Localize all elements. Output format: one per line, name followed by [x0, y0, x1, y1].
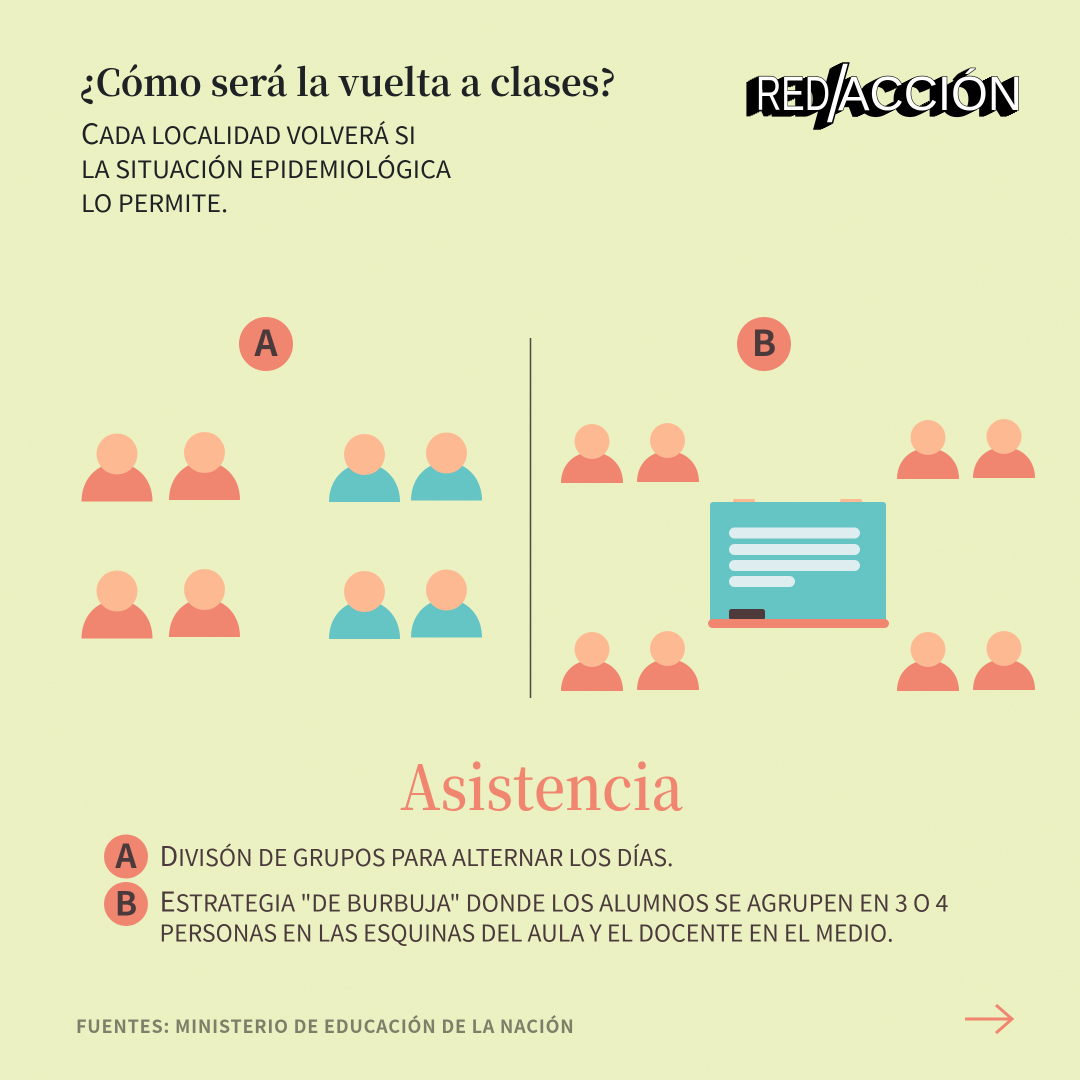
logo: Red/Acción: RED [756, 68, 830, 121]
group A badge: A [253, 315, 278, 367]
group B badge: B [752, 315, 776, 367]
legend item B: PERSONAS EN LAS ESQUINAS DEL AULA Y EL DOCENTE EN EL MEDIO. [160, 914, 894, 948]
bubble: top left [561, 423, 699, 483]
subtitle text block: LA SITUACIÓN EPIDEMIOLÓGICA [81, 150, 451, 185]
student pair: teal, top [329, 432, 482, 502]
legend item B: ESTRATEGIA "DE BURBUJA" DONDE LOS ALUMNOS SE AGRUPEN EN 3 O 4 [160, 880, 949, 920]
icon: next arrow [965, 1005, 1012, 1033]
logo: Red/Acción [756, 49, 1022, 140]
legend item B [104, 878, 949, 948]
heading: Asistencia: Asistencia [400, 739, 683, 828]
bubble: top right [897, 419, 1035, 479]
logo: Red/Acción: ACCIÓN [838, 67, 1022, 121]
title: ¿Cómo será la vuelta a clases? [79, 53, 616, 107]
group B badge [737, 315, 791, 371]
bubble: bottom right [897, 631, 1035, 691]
subtitle text block: LO PERMITE. [81, 184, 228, 219]
student pair: salmon, top [82, 432, 240, 502]
student pair: teal, bottom [329, 570, 482, 639]
student pair: salmon, bottom [82, 569, 240, 638]
panel A: alternating groups of students [82, 432, 482, 639]
sources footer: FUENTES: MINISTERIO DE EDUCACIÓN DE LA NACIÓN [76, 1013, 575, 1039]
subtitle text block [81, 113, 451, 219]
subtitle text block: CADA LOCALIDAD VOLVERÁ SI [81, 113, 416, 153]
bubble: bottom left [561, 631, 699, 691]
legend item B: B [115, 878, 137, 926]
group A badge [239, 315, 293, 371]
panel B: bubble groups around teacher [561, 419, 1035, 691]
icon: blackboard [708, 499, 889, 628]
logo: Red/Acción: / [826, 49, 849, 140]
legend item A: A [114, 830, 137, 878]
legend item A: DIVISÓN DE GRUPOS PARA ALTERNAR LOS DÍAS. [160, 835, 674, 874]
